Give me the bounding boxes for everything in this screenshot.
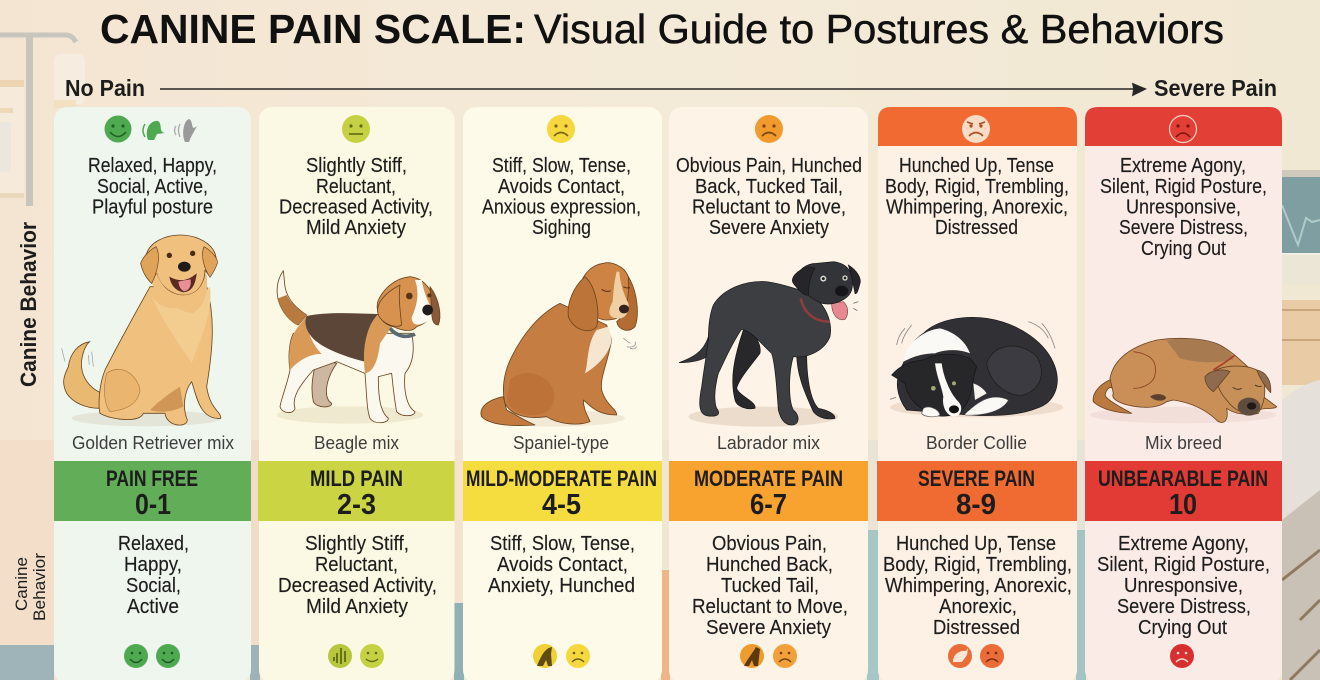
text: behavior summary: Slightly Stiff, xyxy=(306,155,407,177)
icons: tense dog and sad face xyxy=(740,644,797,668)
header: orange strip xyxy=(878,107,1077,146)
band: mild-moderate pain rating: MILD-MODERATE PAIN xyxy=(466,466,657,491)
side label: canine behavior lower: Behavior xyxy=(30,553,49,621)
text: behavior summary: Anxious expression, xyxy=(482,196,641,218)
text: behavior details: Decreased Activity, xyxy=(278,575,437,597)
band: moderate pain rating: 6-7 xyxy=(750,489,787,521)
icons: hunched dog and sad face xyxy=(533,644,590,668)
text: behavior summary: Reluctant, xyxy=(316,176,396,198)
side label: canine behavior lower xyxy=(12,553,49,621)
icon: pained face xyxy=(962,115,990,143)
text: behavior summary: Hunched Up, Tense xyxy=(899,155,1054,177)
text: behavior details: Slightly Stiff, xyxy=(305,533,409,555)
text: behavior details: Silent, Rigid Posture, xyxy=(1097,554,1270,576)
text: behavior summary: Relaxed, Happy, xyxy=(88,155,217,177)
panel: mild pain 2-3 xyxy=(258,107,454,680)
side label: canine behavior upper: Canine Behavior xyxy=(16,222,41,387)
illustration: beagle xyxy=(277,271,440,424)
text: behavior summary: Severe Distress, xyxy=(1119,217,1248,239)
caption: Labrador mix xyxy=(717,433,820,453)
text: behavior summary: Silent, Rigid Posture, xyxy=(1100,176,1267,198)
text: behavior summary: Avoids Contact, xyxy=(498,176,625,198)
panel: pain free 0-1 xyxy=(54,107,251,680)
text: behavior summary: Reluctant to Move, xyxy=(692,196,846,218)
band: unbearable pain rating: 10 xyxy=(1169,489,1197,521)
band: mild pain rating: MILD PAIN xyxy=(310,466,403,491)
band: moderate pain rating: MODERATE PAIN xyxy=(694,466,843,491)
band: severe pain rating: SEVERE PAIN xyxy=(918,466,1035,491)
icon: agony face xyxy=(1170,116,1196,142)
text: behavior summary: Social, Active, xyxy=(97,176,208,198)
text: behavior details xyxy=(692,533,848,639)
text: behavior details: Distressed xyxy=(933,617,1020,639)
text: behavior summary xyxy=(279,155,433,239)
text: behavior summary xyxy=(1100,155,1267,260)
text: behavior details: Anorexic, xyxy=(939,596,1017,618)
side label: canine behavior lower: Canine xyxy=(12,557,31,611)
band: pain free rating: PAIN FREE xyxy=(106,466,198,491)
icons: sound waves and smile xyxy=(328,644,384,668)
title: Visual Guide to Postures & Behaviors xyxy=(534,6,1224,52)
pain scale arrow xyxy=(65,75,1277,101)
text: behavior summary: Back, Tucked Tail, xyxy=(695,176,843,198)
text: behavior summary: Crying Out xyxy=(1141,238,1226,260)
text: behavior summary: Severe Anxiety xyxy=(709,217,829,239)
band: mild pain rating xyxy=(258,461,454,521)
icon: neutral face xyxy=(342,115,370,143)
caption: Beagle mix xyxy=(314,433,399,453)
band: unbearable pain rating xyxy=(1085,461,1282,521)
text: behavior summary: Whimpering, Anorexic, xyxy=(886,196,1068,218)
text: behavior details: Extreme Agony, xyxy=(1118,533,1249,555)
text: behavior details xyxy=(278,533,437,618)
text: behavior details: Stiff, Slow, Tense, xyxy=(490,533,635,555)
text: behavior details: Obvious Pain, xyxy=(712,533,827,555)
caption: Golden Retriever mix xyxy=(72,433,234,453)
text: behavior details: Tucked Tail, xyxy=(721,575,819,597)
illustration: spaniel xyxy=(481,263,637,427)
title: CANINE PAIN SCALE: xyxy=(100,6,526,52)
text: behavior details xyxy=(488,533,635,597)
text: behavior details: Whimpering, Anorexic, xyxy=(885,575,1072,597)
text: behavior details: Reluctant, xyxy=(315,554,398,576)
caption: Border Collie xyxy=(926,433,1027,453)
panel: unbearable pain 10 xyxy=(1085,107,1282,680)
icons: two happy faces xyxy=(124,644,180,668)
text: behavior details: Severe Anxiety xyxy=(706,617,831,639)
icon: happy face and tail wag xyxy=(104,116,197,142)
text: behavior summary: Mild Anxiety xyxy=(306,217,406,239)
text: behavior details: Relaxed, xyxy=(118,533,189,555)
illustration: mixed breed dog xyxy=(1090,338,1277,423)
panel: moderate pain 6-7 xyxy=(669,107,868,680)
text: behavior details: Hunched Back, xyxy=(706,554,833,576)
text: behavior summary: Sighing xyxy=(532,217,591,239)
illustration: border collie xyxy=(890,317,1063,417)
band: mild pain rating: 2-3 xyxy=(337,489,376,521)
text: behavior summary xyxy=(676,155,862,239)
band: severe pain rating xyxy=(877,461,1077,521)
band: unbearable pain rating: UNBEARABLE PAIN xyxy=(1098,466,1268,491)
text: behavior details: Severe Distress, xyxy=(1117,596,1251,618)
text: behavior summary xyxy=(885,155,1069,239)
text: behavior details xyxy=(118,533,189,618)
text: behavior summary: Stiff, Slow, Tense, xyxy=(492,155,631,177)
band: moderate pain rating xyxy=(669,461,868,521)
band: mild-moderate pain rating: 4-5 xyxy=(542,489,581,521)
text: behavior details: Mild Anxiety xyxy=(306,596,408,618)
text: behavior details: Body, Rigid, Trembling, xyxy=(883,554,1072,576)
text: behavior details xyxy=(1097,533,1270,639)
icons: curled dog and sad face xyxy=(948,644,1004,668)
band: severe pain rating: 8-9 xyxy=(956,489,996,521)
text: behavior summary: Decreased Activity, xyxy=(279,196,433,218)
illustration: golden retriever xyxy=(62,235,222,426)
text: behavior details: Social, xyxy=(126,575,181,597)
text: behavior summary xyxy=(482,155,641,239)
text: behavior summary xyxy=(88,155,217,218)
band: pain free rating: 0-1 xyxy=(135,489,171,521)
title xyxy=(100,6,1224,52)
panel: severe pain 8-9 xyxy=(877,107,1077,680)
band: mild-moderate pain rating xyxy=(463,461,662,521)
text: behavior details: Crying Out xyxy=(1138,617,1227,639)
text: behavior details xyxy=(883,533,1072,639)
icon: sad face xyxy=(547,115,575,143)
label: no pain: No Pain xyxy=(65,75,145,101)
text: behavior summary: Obvious Pain, Hunched xyxy=(676,155,862,177)
icon: worried face xyxy=(755,115,783,143)
caption: Mix breed xyxy=(1145,433,1222,453)
label: severe pain: Severe Pain xyxy=(1154,75,1277,101)
text: behavior summary: Distressed xyxy=(935,217,1018,239)
text: behavior details: Avoids Contact, xyxy=(497,554,628,576)
text: behavior summary: Unresponsive, xyxy=(1126,196,1241,218)
header: red strip xyxy=(1085,107,1282,146)
band: pain free rating xyxy=(54,461,251,521)
illustration: labrador xyxy=(679,262,860,427)
text: behavior details: Happy, xyxy=(124,554,182,576)
text: behavior details: Anxiety, Hunched xyxy=(488,575,635,597)
icon: agony face xyxy=(1170,644,1194,668)
text: behavior details: Reluctant to Move, xyxy=(692,596,848,618)
text: behavior summary: Playful posture xyxy=(92,196,213,218)
text: behavior details: Active xyxy=(127,596,179,618)
caption: Spaniel-type xyxy=(513,433,609,453)
panel: mild-moderate pain 4-5 xyxy=(463,107,662,680)
text: behavior details: Hunched Up, Tense xyxy=(896,533,1056,555)
text: behavior details: Unresponsive, xyxy=(1124,575,1243,597)
text: behavior summary: Body, Rigid, Trembling, xyxy=(885,176,1069,198)
arrow xyxy=(160,84,1145,95)
text: behavior summary: Extreme Agony, xyxy=(1120,155,1246,177)
